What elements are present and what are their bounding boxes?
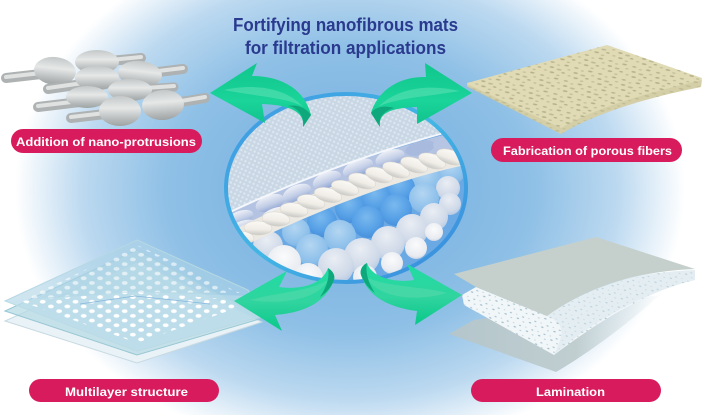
arrow: to multilayer structure (234, 268, 334, 331)
top nanofibrous layer (228, 96, 440, 210)
foam core (462, 270, 695, 355)
title: for filtration applications (245, 37, 446, 58)
shingled middle layer (232, 133, 454, 228)
multilayer structure illustration (5, 238, 263, 363)
label: Fabrication of porous fibers (491, 138, 682, 162)
label: Multilayer structure: Multilayer structure (65, 385, 188, 399)
title (233, 14, 458, 58)
nano-protrusions fibers illustration (6, 50, 205, 126)
lower sheets (5, 262, 262, 363)
bottom sheet (449, 295, 660, 372)
top perforated sheet (5, 240, 263, 351)
blue spheres (252, 166, 464, 280)
label: Addition of nano-protrusions (11, 129, 202, 153)
central circular image of fibrous mat layers (224, 92, 468, 284)
twisted rope (240, 148, 460, 243)
lamination illustration (449, 237, 695, 372)
arrow: to nano-protrusions (210, 63, 311, 127)
label: Multilayer structure (29, 379, 219, 402)
label: Lamination (471, 379, 661, 402)
arrow: to lamination (361, 263, 462, 325)
circle border (226, 94, 466, 282)
white spheres (268, 194, 461, 280)
label: Fabrication of porous fibers: Fabrication of porous fibers (503, 144, 672, 158)
label: Lamination: Lamination (536, 385, 605, 399)
porous fiber sheet illustration (467, 45, 702, 134)
arrow: to porous fibers (371, 63, 472, 127)
title: Fortifying nanofibrous mats (233, 14, 458, 35)
label: Addition of nano-protrusions: Addition of nano-protrusions (16, 135, 196, 149)
top sheet (454, 237, 695, 316)
